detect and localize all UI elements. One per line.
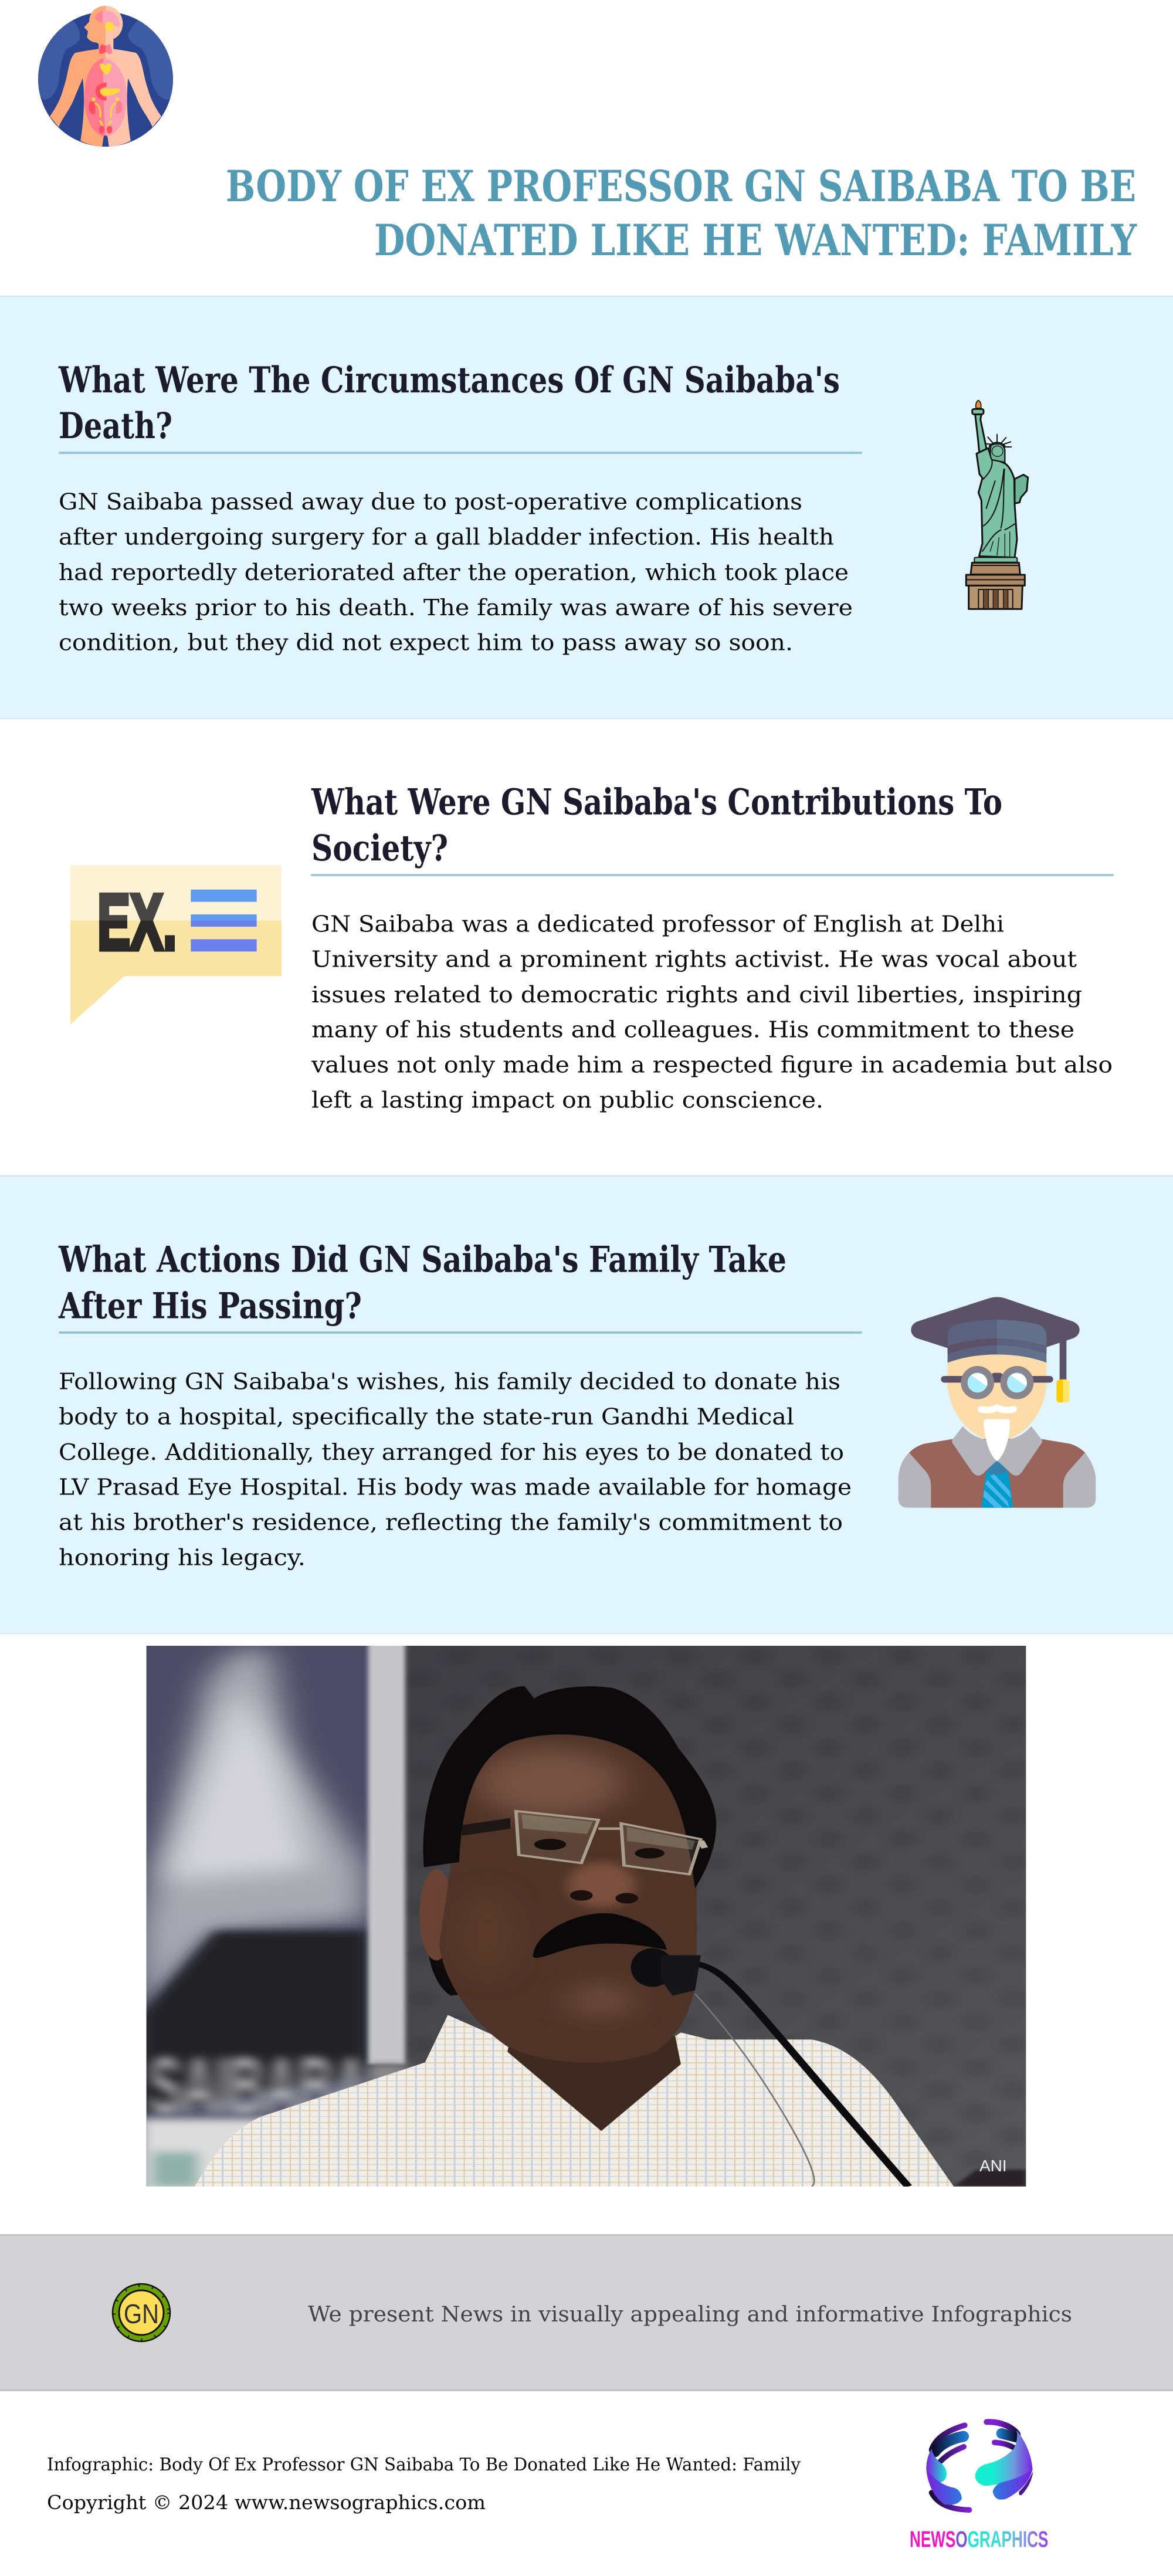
icon: GN badge bbox=[113, 2284, 170, 2341]
header bbox=[31, 6, 1137, 266]
text block: contributions: left a lasting impact on public conscience. bbox=[311, 1087, 823, 1114]
icon: EX speech bubble bbox=[70, 865, 282, 1025]
text block: family actions bbox=[59, 1369, 852, 1571]
icon: GN badge: GN bbox=[124, 2299, 159, 2329]
icon: EX speech bubble: EX. bbox=[97, 878, 177, 967]
text block: circumstances: condition, but they did not expect him to pass away so soon. bbox=[59, 630, 793, 656]
icon: professor bbox=[899, 1297, 1096, 1508]
text block: circumstances bbox=[59, 489, 853, 656]
text block: family actions: College. Additionally, they arranged for his eyes to be donated to bbox=[59, 1439, 844, 1466]
text block: contributions: University and a prominent rights activist. He was vocal about bbox=[311, 947, 1077, 973]
text block: family actions: LV Prasad Eye Hospital. His body was made available for homage bbox=[59, 1475, 852, 1501]
heading: contributions: What Were GN Saibaba's Contributions To bbox=[311, 781, 1002, 823]
text block: family actions: at his brother's residence, reflecting the family's commitment to bbox=[59, 1510, 843, 1536]
heading: circumstances: Death? bbox=[59, 405, 172, 447]
heading: family actions: What Actions Did GN Saibaba's Family Take bbox=[58, 1239, 786, 1281]
heading: contributions: Society? bbox=[311, 828, 448, 869]
photo: GN Saibaba at microphone: SAIBABA bbox=[150, 2041, 368, 2131]
heading: contributions bbox=[311, 781, 1002, 869]
panel: tagline band bbox=[0, 2234, 1173, 2391]
credit text: Infographic: Body Of Ex Professor GN Saibaba To Be Donated Like He Wanted: Family bbox=[47, 2455, 801, 2475]
heading: family actions: After His Passing? bbox=[58, 1286, 362, 1327]
panel: family actions bbox=[0, 1175, 1173, 1634]
text block: contributions bbox=[311, 911, 1113, 1114]
heading: family actions bbox=[58, 1239, 786, 1327]
text block: circumstances: had reportedly deteriorated after the operation, which took place bbox=[59, 560, 849, 586]
credit text bbox=[47, 2455, 801, 2514]
panel: contributions to society bbox=[70, 781, 1114, 1114]
credit text: Copyright © 2024 www.newsographics.com bbox=[47, 2491, 486, 2514]
text block: circumstances: after undergoing surgery for a gall bladder infection. His health bbox=[59, 524, 834, 551]
icon: statue of liberty bbox=[966, 401, 1028, 609]
photo credit: ANI bbox=[979, 2157, 1007, 2175]
logo: newsographics: NEWSOGRAPHICS bbox=[910, 2527, 1048, 2553]
text block: family actions: honoring his legacy. bbox=[59, 1545, 306, 1571]
text block: contributions: values not only made him a respected figure in academia but also bbox=[311, 1052, 1113, 1079]
text block: contributions: issues related to democratic rights and civil liberties, inspiring bbox=[311, 982, 1082, 1008]
panel: circumstances of death bbox=[0, 296, 1173, 719]
text block: family actions: Following GN Saibaba's wishes, his family decided to donate his bbox=[59, 1369, 840, 1395]
text block: circumstances: GN Saibaba passed away due to post-operative complications bbox=[59, 489, 802, 516]
text block: family actions: body to a hospital, specifically the state-run Gandhi Medical bbox=[59, 1404, 794, 1431]
heading: circumstances bbox=[58, 360, 840, 447]
icon: human body organs bbox=[31, 6, 180, 147]
photo: GN Saibaba at microphone bbox=[141, 1642, 1032, 2196]
text block: contributions: GN Saibaba was a dedicated professor of English at Delhi bbox=[311, 911, 1004, 938]
tagline: We present News in visually appealing and informative Infographics bbox=[308, 2303, 1072, 2327]
text block: circumstances: two weeks prior to his death. The family was aware of his severe bbox=[59, 595, 853, 621]
footer bbox=[47, 2422, 1048, 2553]
text block: contributions: many of his students and colleagues. His commitment to these bbox=[311, 1017, 1074, 1043]
logo: newsographics bbox=[910, 2422, 1048, 2553]
title bbox=[226, 161, 1137, 266]
heading: circumstances: What Were The Circumstances Of GN Saibaba's bbox=[58, 360, 840, 401]
